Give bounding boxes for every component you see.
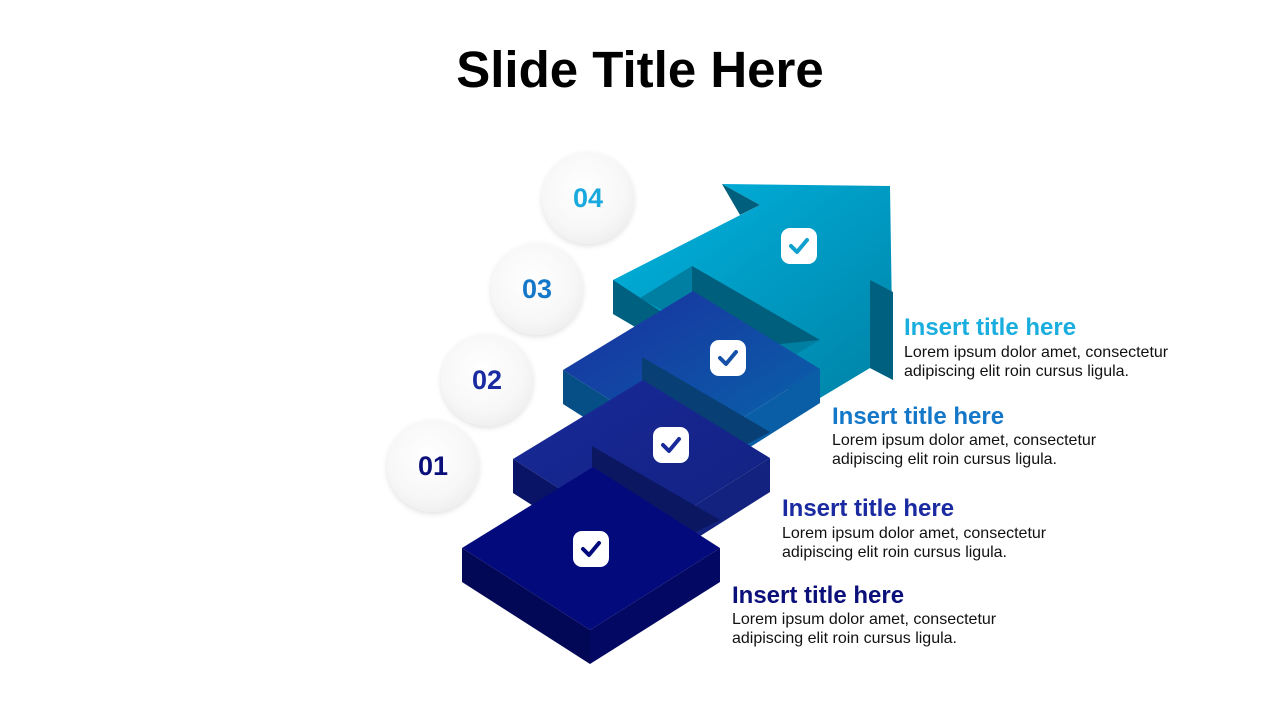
text block 2 <box>782 495 1046 561</box>
text: Lorem ipsum dolor amet, consectetur <box>782 525 1046 542</box>
text block 4 <box>904 314 1168 380</box>
text: Insert title here <box>732 582 904 609</box>
text: Lorem ipsum dolor amet, consectetur <box>904 344 1168 361</box>
step 1 <box>462 467 720 664</box>
number circle 01 <box>387 420 479 512</box>
text block 1 <box>732 582 996 647</box>
text: Insert title here <box>904 314 1076 341</box>
number circle 02: 02 <box>472 364 502 394</box>
text: Lorem ipsum dolor amet, consectetur <box>732 611 996 628</box>
text: Insert title here <box>782 495 954 522</box>
text: adipiscing elit roin cursus ligula. <box>732 630 957 647</box>
text: Lorem ipsum dolor amet, consectetur <box>832 432 1096 449</box>
step 3 <box>563 291 820 485</box>
number circle 04 <box>542 152 634 244</box>
number circle 03: 03 <box>522 274 552 304</box>
step 2 <box>513 380 770 574</box>
check icons <box>573 228 817 567</box>
text: adipiscing elit roin cursus ligula. <box>832 451 1057 468</box>
number circle 04: 04 <box>573 182 603 212</box>
text block 3 <box>832 403 1096 468</box>
title: Slide Title Here <box>456 41 824 98</box>
text: adipiscing elit roin cursus ligula. <box>904 363 1129 380</box>
number circle 02 <box>441 334 533 426</box>
text: Insert title here <box>832 403 1004 430</box>
text: adipiscing elit roin cursus ligula. <box>782 544 1007 561</box>
step 4 arrow <box>613 184 893 398</box>
number circle 01: 01 <box>418 450 448 480</box>
number circle 03 <box>491 243 583 335</box>
